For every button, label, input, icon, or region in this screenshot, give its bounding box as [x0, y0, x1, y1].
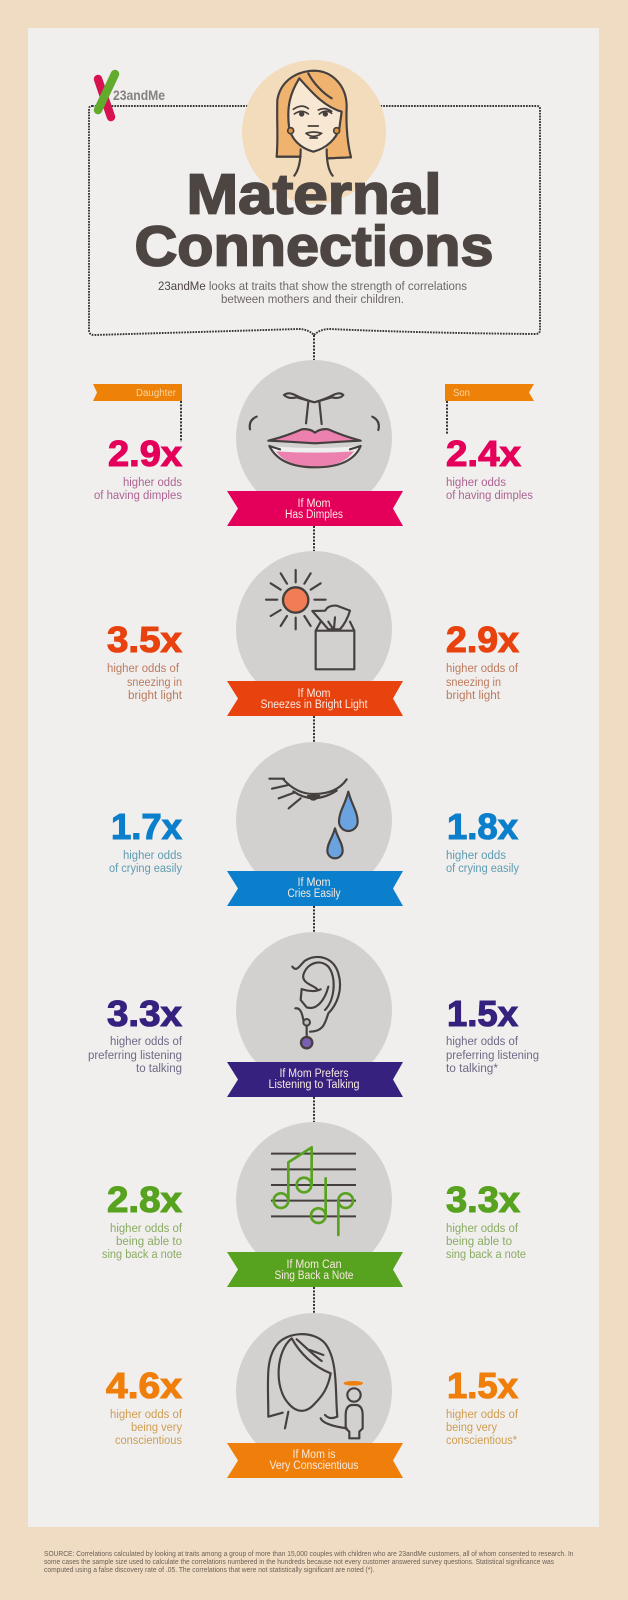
daughter stat: higher odds of [110, 1407, 183, 1421]
logo: 23andMe [98, 74, 165, 117]
banner: sneezes in bright light [227, 681, 403, 716]
circle and music notes icon [236, 1122, 392, 1278]
son stat: higher odds of [446, 661, 519, 675]
daughter stat: sing back a note [102, 1247, 182, 1261]
banner: very conscientious: If Mom is [292, 1449, 336, 1461]
source note: SOURCE: Correlations calculated by looking at traits among a group of more than 15,000 couples with children who are 23andMe customers, all of whom consented to research. In [44, 1551, 574, 1558]
son stat [446, 1365, 519, 1447]
banner: can sing back a note [227, 1252, 403, 1287]
daughter stat: 4.6x [106, 1365, 182, 1406]
daughter stat [107, 619, 183, 702]
daughter stat: bright light [128, 688, 183, 702]
son stat: preferring listening [446, 1048, 539, 1062]
daughter stat: of having dimples [94, 488, 182, 502]
banner: can sing back a note: If Mom Can [286, 1259, 342, 1271]
daughter stat: 3.5x [107, 619, 182, 660]
son stat: to talking* [446, 1061, 498, 1075]
son flag: Son [453, 388, 470, 399]
banner: very conscientious [227, 1443, 403, 1478]
son stat [446, 806, 520, 875]
section: conscientious [106, 1313, 519, 1478]
title: Maternal [186, 162, 442, 226]
daughter stat: of crying easily [109, 861, 183, 875]
daughter stat: sneezing in [127, 675, 182, 689]
daughter stat [88, 993, 183, 1075]
source note: some cases the sample size used to calculate the correlations numbered in the hundreds because not every customer answered survey questions. Statistical significance was [44, 1559, 554, 1566]
intro text: 23andMe looks at traits that show the strength of correlations [158, 279, 467, 293]
daughter stat: higher odds [123, 848, 182, 862]
logo: 23andMe: 23andMe [113, 88, 165, 103]
section: dimples [93, 360, 534, 526]
banner: cries easily [227, 871, 403, 906]
daughter stat: 2.8x [107, 1179, 182, 1220]
son stat: 1.8x [447, 806, 518, 847]
daughter stat: being very [131, 1420, 183, 1434]
connector lines [313, 335, 315, 1313]
daughter stat: 3.3x [107, 993, 182, 1034]
daughter flag [93, 384, 182, 442]
son stat: 1.5x [447, 1365, 518, 1406]
circle and sun with tissue box icon [236, 551, 392, 707]
daughter stat: higher odds of [107, 661, 180, 675]
daughter stat [109, 806, 183, 875]
banner: sneezes in bright light: If Mom [298, 688, 330, 700]
son stat: higher odds [446, 848, 506, 862]
daughter stat: higher odds of [110, 1034, 183, 1048]
son stat: 1.5x [447, 993, 518, 1034]
son stat: higher odds of [446, 1221, 519, 1235]
banner: can sing back a note: Sing Back a Note [274, 1270, 354, 1282]
daughter stat: higher odds of [110, 1221, 183, 1235]
source note: computed using a false discovery rate of .05. The correlations that were not statistically significant are noted (*). [44, 1567, 375, 1574]
daughter stat: preferring listening [88, 1048, 182, 1062]
banner: prefers listening to talking: Listening to Talking [268, 1079, 360, 1091]
son stat: conscientious* [446, 1433, 517, 1447]
daughter stat: 1.7x [111, 806, 182, 847]
banner: cries easily: Cries Easily [288, 888, 341, 900]
son stat: higher odds of [446, 1407, 519, 1421]
son stat [446, 1179, 526, 1261]
circle and ear with earring icon [236, 932, 392, 1088]
son stat: bright light [446, 688, 501, 702]
son stat [446, 619, 519, 702]
son stat: being very [446, 1420, 498, 1434]
source note [44, 1551, 574, 1574]
daughter stat [94, 433, 182, 502]
section: crying [109, 742, 520, 906]
daughter stat [102, 1179, 183, 1261]
section: listening [88, 932, 539, 1097]
banner: very conscientious: Very Conscientious [270, 1460, 359, 1472]
son stat [446, 993, 539, 1075]
title [134, 162, 493, 278]
circle and lips icon [236, 360, 392, 516]
son stat: sneezing in [446, 675, 501, 689]
son stat: sing back a note [446, 1247, 526, 1261]
son stat: 2.4x [446, 433, 521, 474]
son stat: of crying easily [446, 861, 520, 875]
banner: prefers listening to talking: If Mom Prefers [280, 1068, 349, 1080]
banner: sneezes in bright light: Sneezes in Bright Light [260, 699, 368, 711]
banner: if mom has dimples: If Mom [298, 498, 330, 510]
banner: if mom has dimples: Has Dimples [285, 509, 343, 521]
daughter stat: to talking [136, 1061, 182, 1075]
banner: prefers listening to talking [227, 1062, 403, 1097]
son stat: being able to [446, 1234, 512, 1248]
son stat: 2.9x [446, 619, 519, 660]
daughter flag: Daughter [136, 388, 177, 399]
daughter stat: being able to [116, 1234, 182, 1248]
son stat [446, 433, 533, 502]
icon: portrait of mother [242, 60, 386, 204]
daughter stat: conscientious [115, 1433, 182, 1447]
son flag [445, 384, 534, 435]
circle and mother with halo child icon [236, 1313, 392, 1469]
banner: cries easily: If Mom [298, 877, 330, 889]
banner: if mom has dimples [227, 491, 403, 526]
section: sneezing [107, 551, 519, 716]
intro text [158, 279, 467, 306]
son stat: of having dimples [446, 488, 533, 502]
circle and eye with tears icon [236, 742, 392, 898]
daughter stat: higher odds [123, 475, 182, 489]
daughter stat: 2.9x [108, 433, 182, 474]
son stat: higher odds of [446, 1034, 519, 1048]
daughter stat [106, 1365, 183, 1447]
son stat: 3.3x [446, 1179, 520, 1220]
header: dotted frame [89, 106, 540, 335]
son stat: higher odds [446, 475, 506, 489]
section: singing [102, 1122, 526, 1287]
intro text: between mothers and their children. [221, 292, 404, 306]
title: Connections [134, 214, 493, 278]
